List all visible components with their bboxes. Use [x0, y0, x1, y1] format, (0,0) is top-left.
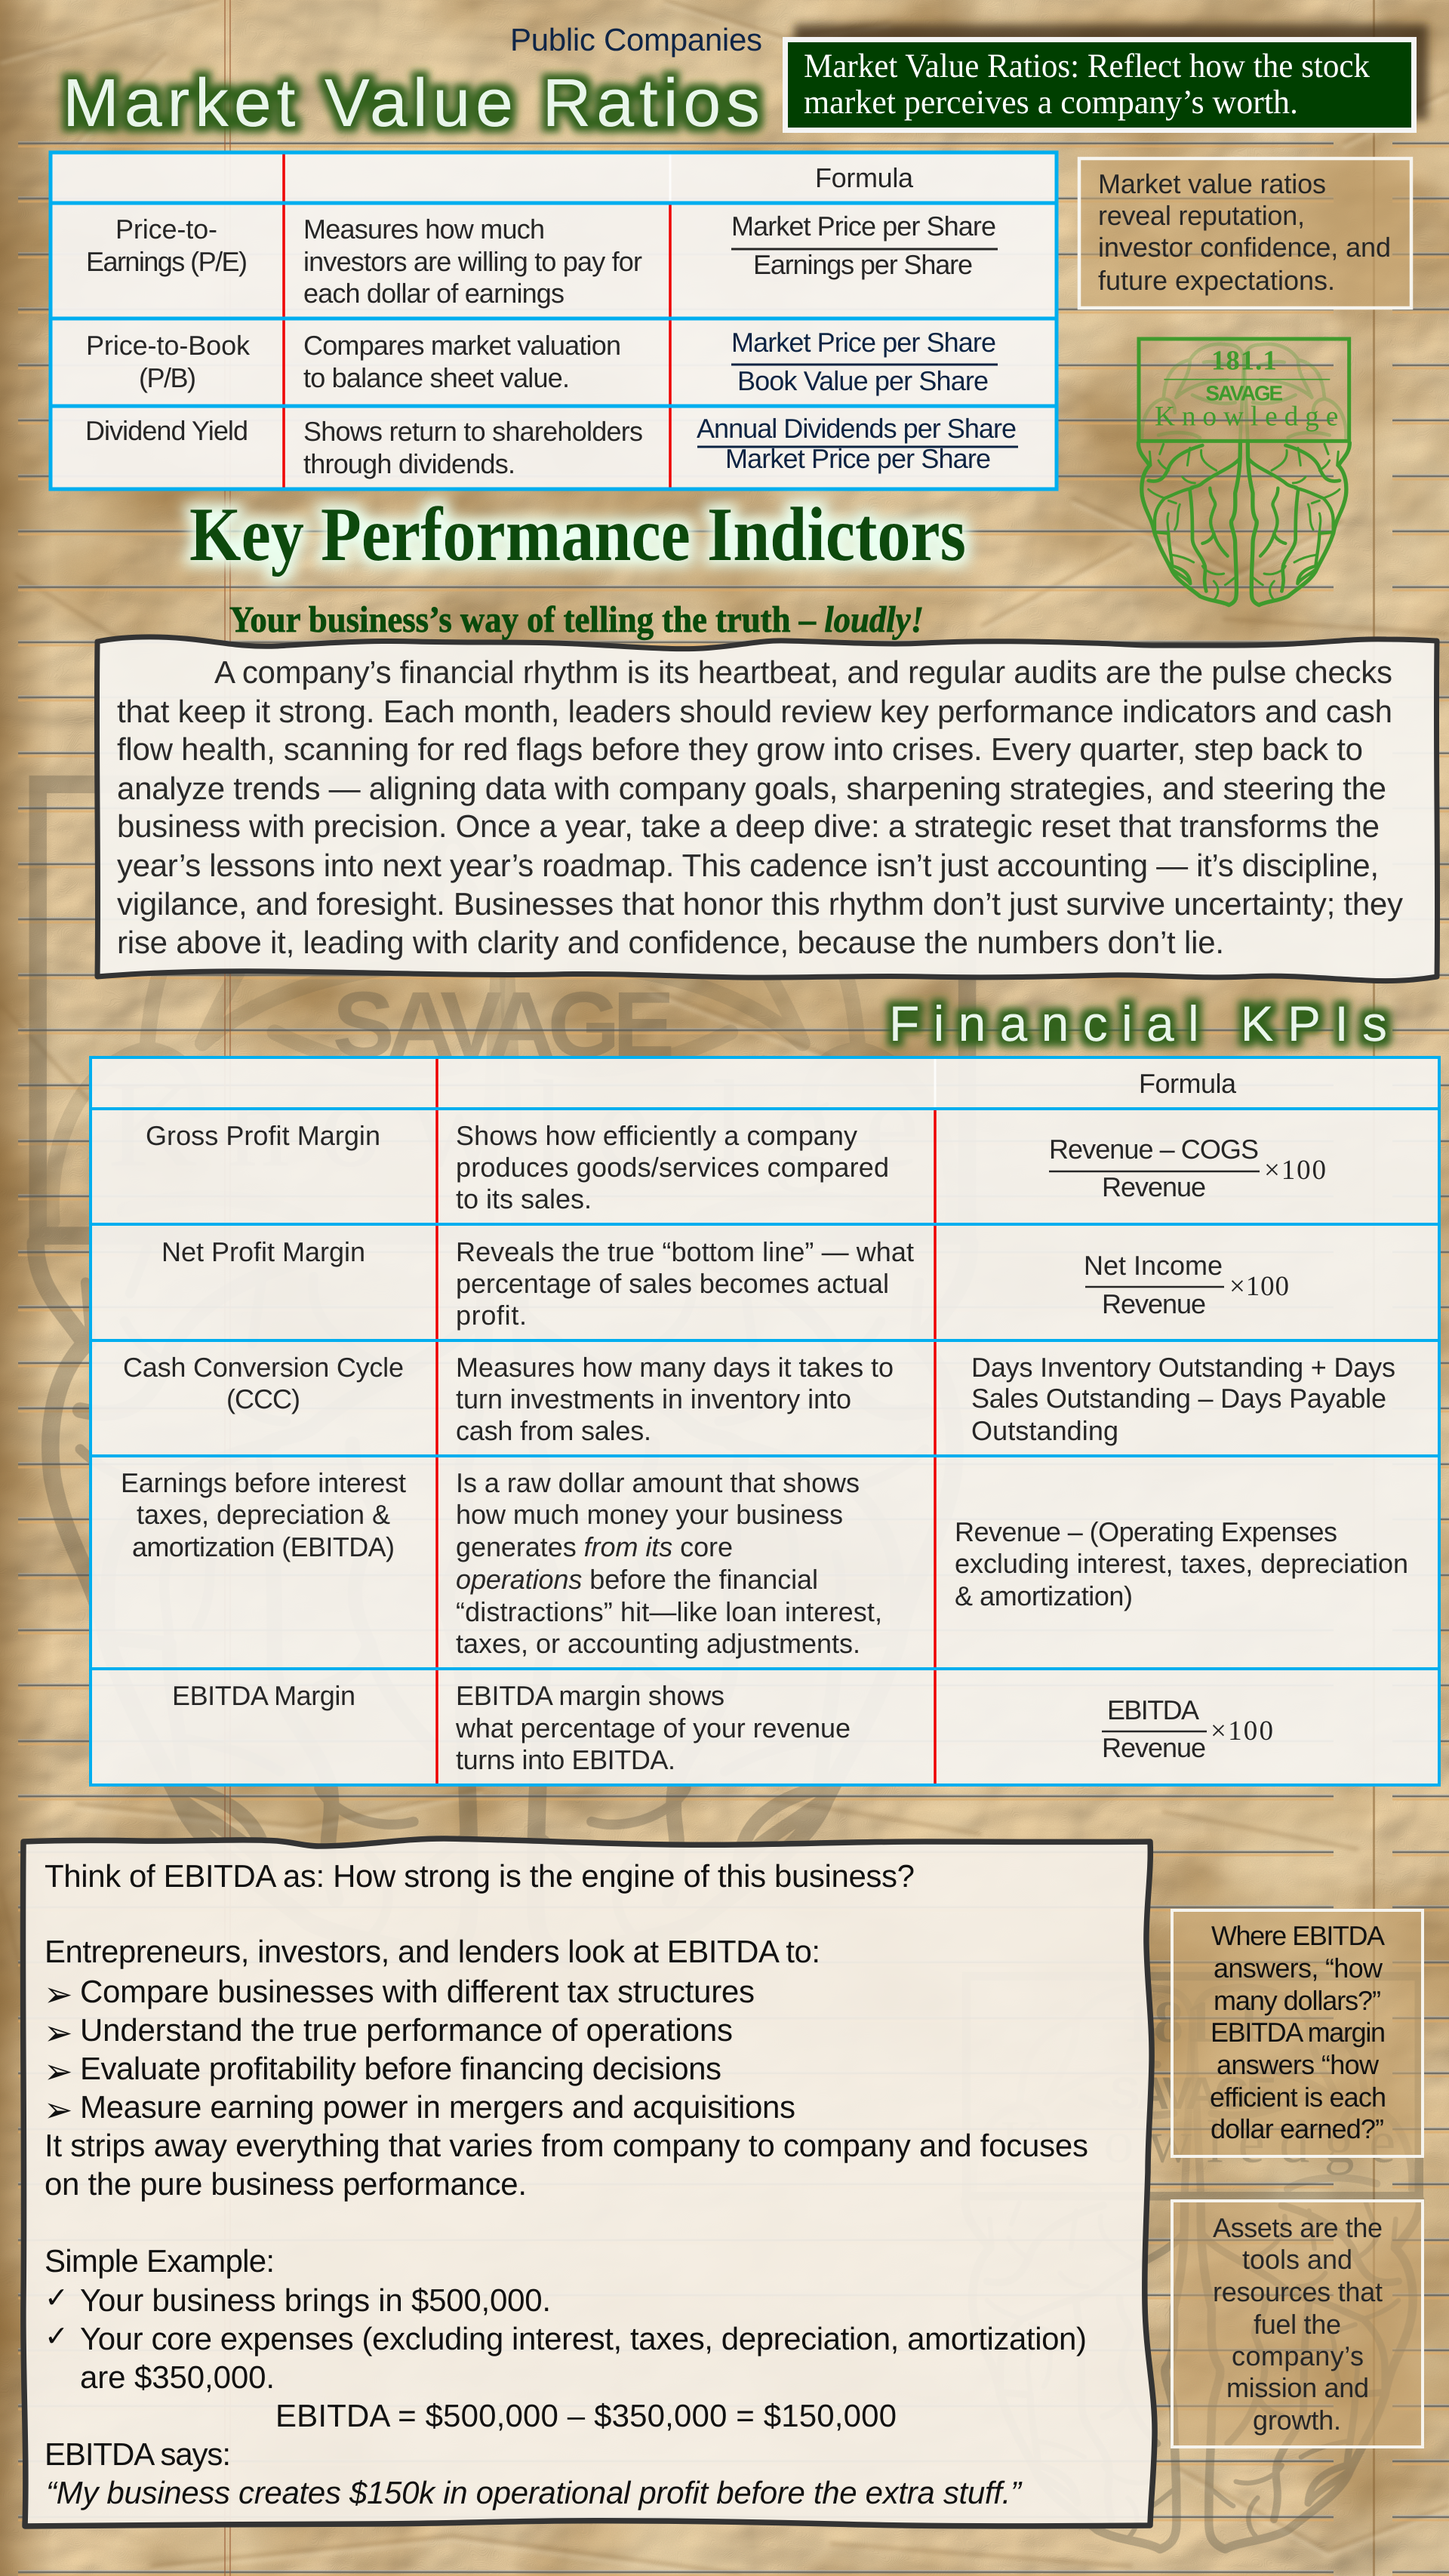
list: simple example: ✓ — [45, 2281, 69, 2314]
callout: assets: mission and — [1226, 2372, 1369, 2403]
panel: financial rhythm paragraph — [97, 637, 1438, 981]
panel: think of ebitda — [23, 1839, 1155, 2526]
logo: 181.1 savage knowledge brain: Knowledge — [1155, 400, 1338, 432]
panel: financial rhythm paragraph: business with precision. Once a year, take a deep dive: a strategic reset that transforms the — [117, 808, 1380, 844]
watermark logo large: Knowledge — [108, 1056, 919, 1193]
panel: think of ebitda: Think of EBITDA as: How strong is the engine of this business? — [45, 1858, 915, 1894]
red margin line — [225, 0, 230, 2576]
panel: financial rhythm paragraph: vigilance, and foresight. Businesses that honor this rhythm don’t just survive uncertainty; they — [117, 886, 1403, 922]
row: price to book: to balance sheet value. — [303, 362, 570, 393]
row: price to earnings: investors are willing to pay for — [303, 246, 642, 277]
row: price to earnings: Price-to- — [115, 214, 217, 245]
row: ebitda margin — [172, 1680, 1273, 1775]
panel: think of ebitda: “My business creates $150k in operational profit before the extra stuff.” — [46, 2475, 1023, 2510]
logo: 181.1 savage knowledge brain: SAVAGE — [1205, 381, 1283, 405]
row: dividend yield: Market Price per Share — [725, 443, 991, 474]
heading: financial kpis: Financial KPIs — [889, 996, 1387, 1051]
row: cash conversion cycle: Cash Conversion Cycle — [123, 1352, 404, 1383]
row: cash conversion cycle — [123, 1352, 1395, 1446]
watermark logo large — [35, 784, 970, 1961]
panel: think of ebitda: Simple Example: — [45, 2243, 275, 2279]
row: cash conversion cycle: Measures how many days it takes to — [456, 1352, 894, 1383]
row: ebitda: generates from its core — [456, 1531, 733, 1562]
row: ebitda margin: ×100 — [1211, 1716, 1273, 1747]
row: net profit margin: percentage of sales becomes actual — [456, 1268, 889, 1299]
row: ebitda margin: EBITDA — [1107, 1694, 1199, 1725]
callout: where ebitda answers — [1172, 1910, 1423, 2156]
logo: 181.1 savage knowledge brain: 181.1 — [1211, 345, 1277, 375]
row: cash conversion cycle: Days Inventory Outstanding + Days — [971, 1352, 1395, 1383]
callout: market value ratios reveal — [1079, 158, 1411, 308]
panel: financial rhythm paragraph: flow health, scanning for red flags before they grow into crises. Every quarter, step back to — [117, 731, 1363, 767]
row: ebitda margin: Revenue — [1102, 1732, 1206, 1763]
row: dividend yield: Shows return to shareholders — [303, 416, 643, 447]
callout: where ebitda answers: many dollars?” — [1214, 1985, 1381, 2016]
definition banner: Market Value Ratios: Reflect how the stock — [804, 47, 1370, 85]
row: ebitda margin: EBITDA Margin — [172, 1680, 355, 1711]
row: net profit margin: Revenue — [1102, 1288, 1206, 1319]
list: reasons to use ebitda: Measure earning power in mergers and acquisitions — [80, 2089, 795, 2125]
row: ebitda: taxes, or accounting adjustments. — [456, 1628, 860, 1659]
row: ebitda: excluding interest, taxes, depreciation — [955, 1548, 1408, 1579]
callout: market value ratios reveal: investor confidence, and — [1098, 232, 1391, 263]
callout: where ebitda answers: answers, “how — [1214, 1953, 1383, 1984]
row: price to book: Market Price per Share — [731, 327, 996, 358]
callout: assets: resources that — [1213, 2276, 1383, 2307]
header cell: formula: Formula — [815, 162, 914, 193]
list: reasons to use ebitda — [44, 1974, 795, 2130]
panel: think of ebitda: EBITDA says: — [45, 2436, 231, 2472]
callout: market value ratios reveal: future expectations. — [1098, 265, 1335, 296]
watermark logo large: 181.1 — [358, 810, 647, 946]
row: price to earnings: Earnings (P/E) — [86, 246, 248, 277]
list: reasons to use ebitda: ➢ — [44, 2012, 73, 2053]
row: price to earnings: Measures how much — [303, 214, 545, 245]
row: cash conversion cycle: cash from sales. — [456, 1415, 651, 1446]
row: net profit margin: Reveals the true “bottom line” — what — [456, 1236, 914, 1267]
row: cash conversion cycle: (CCC) — [226, 1383, 300, 1414]
row: price to book: Book Value per Share — [737, 365, 989, 396]
row: dividend yield: Dividend Yield — [85, 415, 248, 446]
definition banner — [785, 24, 1428, 130]
row: price to earnings: Earnings per Share — [753, 249, 973, 280]
row: ebitda: Is a raw dollar amount that shows — [456, 1467, 860, 1498]
row: gross profit margin: ×100 — [1264, 1155, 1326, 1186]
row: price to book: Price-to-Book — [86, 330, 251, 361]
watermark logo lower right: Knowledge — [1001, 2108, 1395, 2175]
row: price to book: Compares market valuation — [303, 330, 621, 361]
panel: financial rhythm paragraph: rise above it, leading with clarity and confidence, because the numbers don’t lie. — [117, 925, 1224, 960]
callout: assets: tools and — [1242, 2244, 1352, 2275]
row: ebitda: operations before the financial — [456, 1564, 818, 1595]
callout: where ebitda answers: EBITDA margin — [1211, 2017, 1386, 2048]
panel: financial rhythm paragraph: A company’s financial rhythm is its heartbeat, and regular audits are the pulse checks — [214, 654, 1392, 690]
watermark logo lower right: SAVAGE — [1110, 2068, 1277, 2119]
callout: assets: company’s — [1232, 2341, 1364, 2371]
row: net profit margin: profit. — [456, 1300, 527, 1331]
list: reasons to use ebitda: ➢ — [44, 1974, 73, 2014]
row: dividend yield: through dividends. — [303, 448, 515, 479]
subheading: truth loudly: Your business’s way of telling the truth – loudly! — [229, 599, 924, 640]
list: reasons to use ebitda: ➢ — [44, 2089, 73, 2130]
header cell: formula: Formula — [1139, 1068, 1237, 1099]
list: reasons to use ebitda: Understand the true performance of operations — [80, 2012, 733, 2048]
row: cash conversion cycle: Outstanding — [971, 1415, 1118, 1446]
row: ebitda margin: EBITDA margin shows — [456, 1680, 724, 1711]
row: ebitda: how much money your business — [456, 1499, 843, 1530]
row: ebitda: Earnings before interest — [121, 1467, 406, 1498]
heading: key performance indictors: Key Performance Indictors — [189, 492, 966, 577]
callout: where ebitda answers: answers “how — [1217, 2049, 1380, 2080]
callout: assets — [1172, 2201, 1423, 2447]
panel: financial rhythm paragraph: analyze trends — aligning data with company goals, sharpening strategies, and steering the — [117, 771, 1386, 806]
callout: assets: growth. — [1253, 2405, 1341, 2436]
callout: market value ratios reveal: Market value ratios — [1098, 168, 1326, 199]
callout: where ebitda answers: Where EBITDA — [1211, 1920, 1385, 1951]
callout: assets: Assets are the — [1213, 2212, 1383, 2243]
row: ebitda: “distractions” hit—like loan interest, — [456, 1596, 882, 1627]
panel: think of ebitda: EBITDA = $500,000 – $350,000 = $150,000 — [275, 2398, 897, 2433]
panel: financial rhythm paragraph: year’s lessons into next year’s roadmap. This cadence isn’t just accounting — it’s discipline, — [117, 848, 1379, 883]
row: gross profit margin: Revenue — [1102, 1171, 1206, 1202]
title: market value ratios: Market Value Ratios — [63, 66, 760, 141]
callout: where ebitda answers: dollar earned?” — [1211, 2113, 1384, 2144]
list: simple example — [45, 2281, 1087, 2395]
callout: assets: fuel the — [1254, 2309, 1341, 2340]
callout: market value ratios reveal: reveal reputation, — [1098, 200, 1305, 231]
definition banner: market perceives a company’s worth. — [804, 83, 1298, 121]
row: net profit margin: Net Profit Margin — [162, 1236, 365, 1267]
row: ebitda: amortization (EBITDA) — [132, 1531, 395, 1562]
list: reasons to use ebitda: Evaluate profitability before financing decisions — [80, 2051, 721, 2086]
row: price to earnings — [86, 211, 998, 309]
list: simple example: Your core expenses (excluding interest, taxes, depreciation, amortization) — [80, 2321, 1087, 2356]
row: ebitda margin: turns into EBITDA. — [456, 1744, 675, 1775]
row: price to book: (P/B) — [139, 362, 196, 393]
table: market value ratios — [49, 152, 1058, 489]
eyebrow: public companies: Public Companies — [510, 22, 762, 57]
row: gross profit margin — [146, 1120, 1326, 1214]
row: gross profit margin: produces goods/services compared — [456, 1152, 889, 1183]
row: price to earnings: Market Price per Share — [731, 211, 996, 242]
panel: think of ebitda: It strips away everything that varies from company to company and focuses — [45, 2128, 1088, 2163]
watermark logo large: SAVAGE — [332, 972, 675, 1077]
logo: 181.1 savage knowledge brain — [1138, 339, 1349, 605]
row: dividend yield: Annual Dividends per Share — [697, 413, 1017, 444]
row: ebitda margin: what percentage of your revenue — [455, 1713, 851, 1743]
list: reasons to use ebitda: Compare businesses with different tax structures — [80, 1974, 755, 2009]
watermark logo lower right: 181.1 — [1122, 1989, 1263, 2054]
row: gross profit margin: Gross Profit Margin — [146, 1120, 380, 1151]
row: ebitda: Revenue – (Operating Expenses — [955, 1516, 1337, 1547]
row: ebitda — [121, 1467, 1408, 1659]
row: ebitda: taxes, depreciation & — [137, 1499, 390, 1530]
list: reasons to use ebitda: ➢ — [44, 2051, 73, 2091]
callout: where ebitda answers: efficient is each — [1210, 2082, 1386, 2113]
row: ebitda: & amortization) — [955, 1580, 1133, 1611]
row: cash conversion cycle: turn investments in inventory into — [456, 1383, 851, 1414]
list: simple example: ✓ — [45, 2319, 69, 2353]
panel: think of ebitda: Entrepreneurs, investors, and lenders look at EBITDA to: — [45, 1934, 820, 1969]
list: simple example: are $350,000. — [80, 2359, 275, 2395]
row: net profit margin — [162, 1236, 1289, 1331]
row: cash conversion cycle: Sales Outstanding – Days Payable — [971, 1383, 1386, 1414]
row: gross profit margin: to its sales. — [456, 1183, 592, 1214]
list: simple example: Your business brings in $500,000. — [80, 2282, 551, 2318]
panel: think of ebitda: on the pure business performance. — [45, 2166, 527, 2202]
row: net profit margin: ×100 — [1229, 1271, 1289, 1302]
row: gross profit margin: Shows how efficiently a company — [456, 1120, 857, 1151]
row: gross profit margin: Revenue – COGS — [1049, 1134, 1259, 1165]
row: price to earnings: each dollar of earnings — [303, 278, 565, 309]
table: financial kpis — [91, 1057, 1439, 1785]
watermark logo lower right — [965, 1976, 1420, 2550]
panel: financial rhythm paragraph: that keep it strong. Each month, leaders should review key performance indicators and cash — [117, 694, 1392, 729]
row: price to book — [86, 327, 998, 396]
row: dividend yield — [85, 413, 1018, 479]
row: net profit margin: Net Income — [1084, 1250, 1223, 1281]
